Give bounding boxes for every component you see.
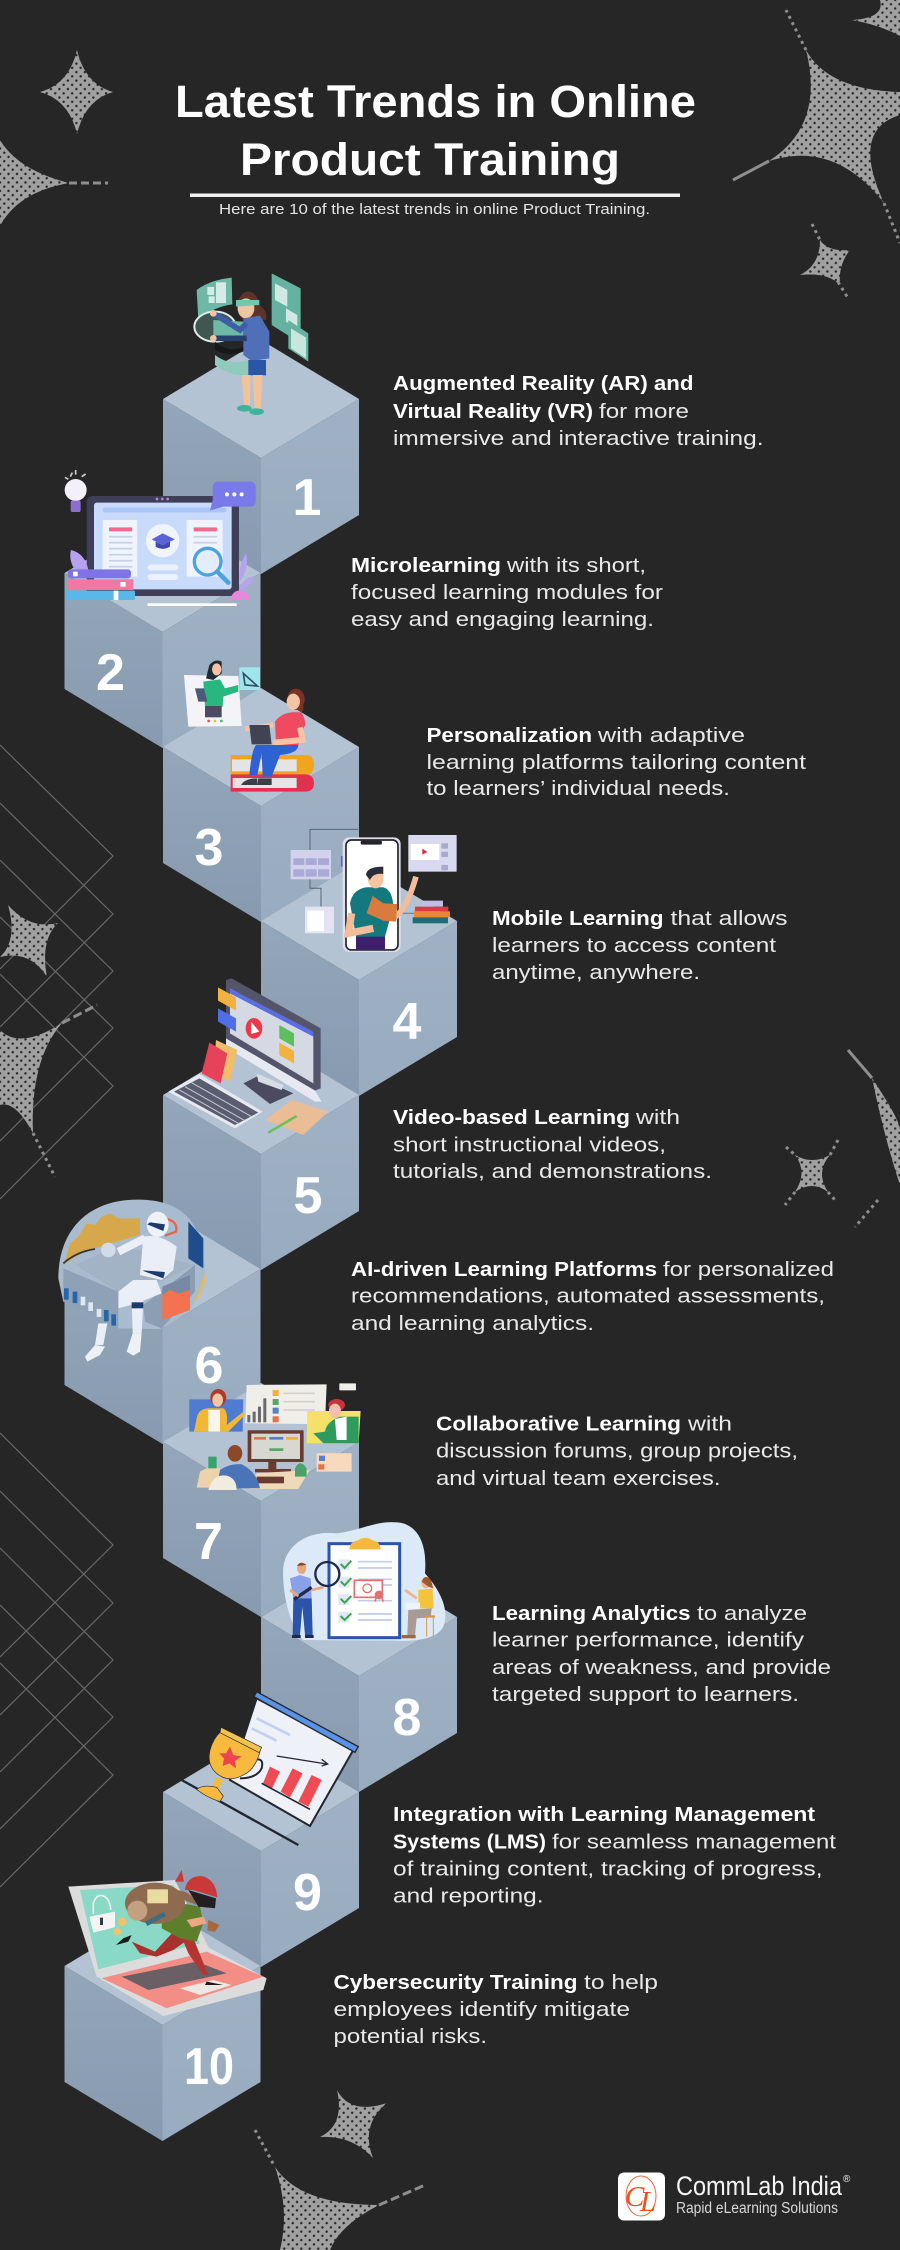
cube 3 — [163, 688, 359, 922]
icon: laptop with course screen and books — [65, 470, 256, 606]
logo: CommLab India: L — [639, 2186, 656, 2218]
step 1 — [163, 273, 359, 574]
step 8 — [261, 1522, 457, 1792]
step 6 — [58, 1200, 260, 1444]
text: step 6: recommendations, automated assessments, — [351, 1285, 825, 1308]
cube 5 — [163, 1036, 359, 1270]
number 9: 9 — [293, 1864, 322, 1922]
text: step 5: with — [635, 1106, 680, 1129]
icon: woman in VR headset — [194, 273, 308, 415]
text: step 4: that allows — [670, 907, 788, 930]
number 6: 6 — [195, 1337, 223, 1395]
number 8: 8 — [393, 1689, 421, 1747]
title: Latest Trends in Online — [175, 76, 696, 127]
text: step 10: employees identify mitigate — [334, 1998, 630, 2021]
cube 10 — [64, 1907, 260, 2141]
icon: clipboard report with analysts — [283, 1522, 445, 1641]
text: step 3: learning platforms tailoring content — [426, 751, 806, 774]
logo: CommLab India: Rapid eLearning Solutions — [676, 2200, 838, 2217]
text: step 5: short instructional videos, — [393, 1134, 666, 1156]
text: step 6: AI-driven Learning Platforms — [351, 1258, 657, 1281]
step 10 — [64, 1870, 267, 2141]
cube 2 — [64, 514, 260, 748]
icon: collaborating team with video panels — [189, 1383, 361, 1490]
number 5: 5 — [294, 1167, 322, 1225]
text: step 5: tutorials, and demonstrations. — [393, 1160, 712, 1183]
text: step 6 — [351, 1258, 834, 1335]
cube 7 — [163, 1383, 359, 1617]
text: step 4: learners to access content — [492, 934, 776, 957]
text: step 10: to help — [584, 1971, 658, 1994]
text: step 9: Systems (LMS) — [393, 1830, 546, 1853]
text: step 2: with its short, — [506, 554, 646, 577]
cube 6 — [64, 1210, 260, 1444]
step 2 — [64, 470, 260, 748]
step 4 — [261, 829, 457, 1096]
logo: CommLab India: CommLab India — [676, 2171, 843, 2201]
step 5 — [163, 978, 359, 1270]
text: step 8: areas of weakness, and provide — [492, 1656, 831, 1679]
cube 9 — [163, 1733, 359, 1967]
cube 8 — [261, 1558, 457, 1792]
text: step 10: potential risks. — [334, 2025, 487, 2048]
text: step 3 — [426, 724, 806, 800]
text: step 1 — [393, 372, 764, 450]
text: step 3: to learners’ individual needs. — [426, 777, 730, 800]
text: step 1: Augmented Reality (AR) and — [393, 372, 694, 395]
title: Product Training — [240, 134, 620, 185]
number 10: 10 — [184, 2038, 234, 2096]
text: step 4 — [492, 907, 788, 984]
text: step 9: of training content, tracking of progress, — [393, 1857, 822, 1880]
icon: robot at analytics dashboard — [58, 1200, 205, 1362]
title — [175, 76, 696, 185]
number 7: 7 — [194, 1513, 223, 1571]
text: step 7 — [436, 1413, 798, 1490]
text: step 3: Personalization — [426, 724, 592, 747]
text: step 2: easy and engaging learning. — [351, 608, 654, 631]
icon: trophy and chart board — [182, 1692, 358, 1845]
icon: phone with instructor and panels — [291, 829, 457, 952]
icon: desktop monitor with video and keyboard — [168, 978, 328, 1135]
text: step 9 — [393, 1803, 836, 1908]
text: step 1: for more — [599, 400, 689, 423]
number 4: 4 — [393, 993, 422, 1051]
logo: CommLab India — [618, 2171, 851, 2220]
text: step 7: and virtual team exercises. — [436, 1467, 720, 1490]
text: step 10 — [334, 1971, 658, 2048]
text: step 8: to analyze — [697, 1602, 807, 1625]
icon: thief escaping laptop — [68, 1870, 267, 2016]
text: step 8: targeted support to learners. — [492, 1683, 799, 1706]
text: step 8: Learning Analytics — [492, 1602, 690, 1625]
number 1: 1 — [293, 469, 321, 527]
subtitle: Here are 10 of the latest trends in online Product Training. — [219, 202, 650, 218]
text: step 4: Mobile Learning — [492, 907, 664, 930]
text: step 3: with adaptive — [597, 724, 745, 747]
text: step 6: for personalized — [663, 1258, 834, 1281]
text: step 2 — [351, 554, 663, 631]
step 9 — [163, 1692, 359, 1967]
text: step 8 — [492, 1602, 831, 1706]
text: step 1: immersive and interactive training. — [393, 427, 764, 450]
text: step 5 — [393, 1106, 712, 1183]
cube 4 — [261, 862, 457, 1096]
text: step 10: Cybersecurity Training — [334, 1971, 578, 1994]
text: step 9: Integration with Learning Management — [393, 1803, 815, 1826]
text: step 1: Virtual Reality (VR) — [393, 400, 593, 423]
step 7 — [163, 1383, 361, 1617]
logo: CommLab India: C — [625, 2181, 645, 2213]
number 2: 2 — [96, 644, 125, 702]
icon: teacher card and student on books — [184, 661, 314, 792]
cube 1 — [163, 340, 359, 574]
title rule — [190, 194, 680, 197]
text: step 4: anytime, anywhere. — [492, 961, 700, 984]
text: step 5: Video-based Learning — [393, 1106, 630, 1129]
text: step 2: focused learning modules for — [351, 581, 663, 604]
logo: CommLab India: ® — [843, 2174, 851, 2185]
text: step 7: with — [687, 1413, 732, 1436]
text: step 8: learner performance, identify — [492, 1629, 805, 1652]
text: step 7: discussion forums, group projects, — [436, 1440, 798, 1463]
text: step 6: and learning analytics. — [351, 1312, 594, 1335]
text: step 7: Collaborative Learning — [436, 1413, 681, 1436]
number 3: 3 — [195, 819, 223, 877]
step 3 — [163, 661, 359, 922]
text: step 9: for seamless management — [552, 1830, 836, 1853]
text: step 9: and reporting. — [393, 1884, 544, 1908]
text: step 2: Microlearning — [351, 554, 501, 577]
